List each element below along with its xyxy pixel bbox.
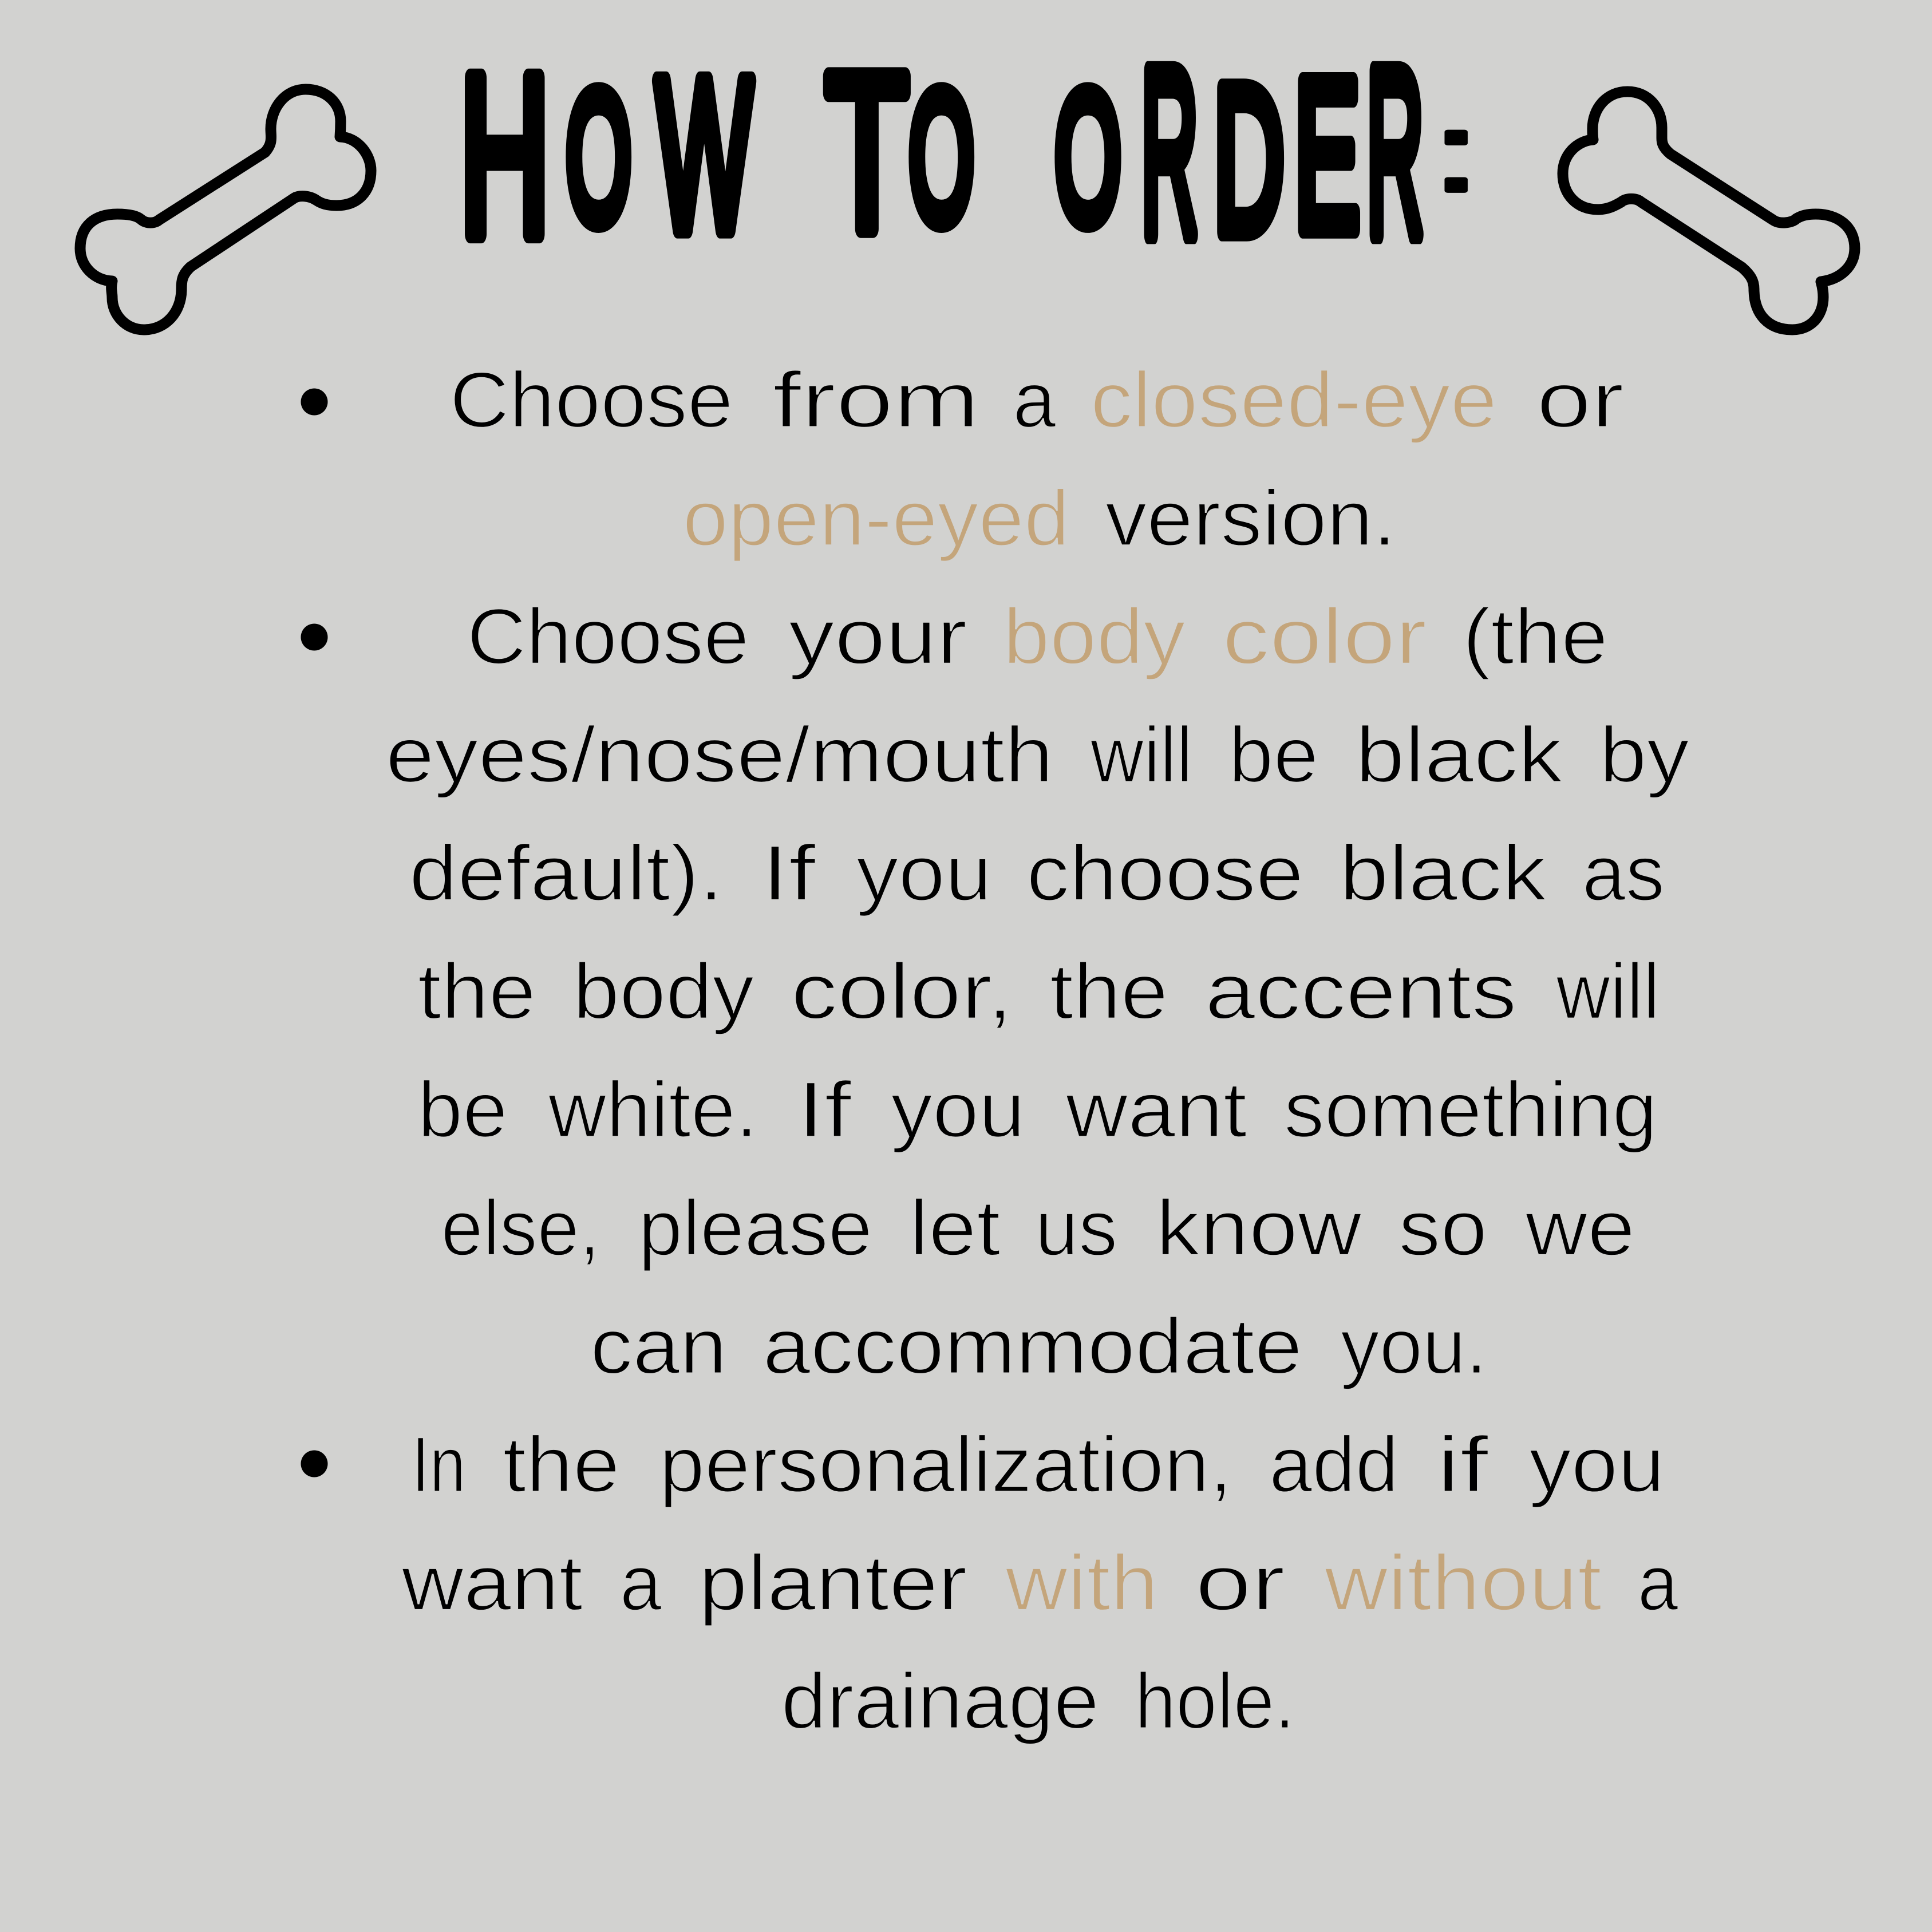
text block: step 3: or xyxy=(1195,1539,1285,1627)
text block: step 1: version. xyxy=(1105,474,1396,562)
title: HOW TO ORDER:: D xyxy=(1214,44,1284,276)
icon: right bone xyxy=(1563,92,1855,330)
text block: step 2: body xyxy=(573,947,754,1036)
text block: step 1: from xyxy=(773,356,979,444)
title: HOW TO ORDER:: O xyxy=(566,54,631,262)
text block: step 1 xyxy=(450,356,1624,562)
title: HOW TO ORDER:: R xyxy=(1141,20,1198,285)
text block: step 2: the xyxy=(1050,947,1168,1036)
text block: step 1: Choose xyxy=(450,356,733,444)
text block: step 2: (the xyxy=(1463,592,1608,681)
text block: step 2: please xyxy=(638,1184,872,1272)
text block: step 2: Choose xyxy=(467,592,749,681)
text block: step 2: want xyxy=(1065,1066,1247,1154)
text block: step 2: accents xyxy=(1205,947,1517,1036)
text block: step 2: If xyxy=(761,829,816,917)
text block: step 2: If xyxy=(797,1066,852,1154)
title: HOW TO ORDER:: O xyxy=(909,54,974,262)
text block: step 2: be xyxy=(418,1066,508,1154)
icon: left bone xyxy=(80,89,371,330)
text block: step 2: will xyxy=(1556,947,1660,1036)
text block: step 2: accommodate xyxy=(762,1302,1302,1390)
text block: step 3: the xyxy=(503,1421,620,1509)
title: HOW TO ORDER:: R xyxy=(1366,20,1424,285)
text block: step 2: be xyxy=(1228,711,1318,799)
text block: step 2: can xyxy=(590,1302,727,1390)
title: HOW TO ORDER:: E xyxy=(1294,35,1360,275)
text block: step 2: as xyxy=(1582,829,1665,917)
title: HOW TO ORDER:: : xyxy=(1432,90,1480,214)
text block: step 3: add xyxy=(1269,1421,1398,1509)
bullet 1 xyxy=(301,388,327,416)
text block: step 1: closed-eye xyxy=(1091,356,1497,444)
text block: step 2: we xyxy=(1525,1184,1635,1272)
bullet 3 xyxy=(301,1451,327,1477)
text block: step 3: drainage xyxy=(781,1657,1099,1745)
text block: step 2: something xyxy=(1284,1066,1657,1154)
text block: step 2: black xyxy=(1340,829,1547,917)
text block: step 2: will xyxy=(1090,711,1193,799)
text block: step 2: else, xyxy=(441,1184,600,1272)
text block: step 2 xyxy=(386,592,1689,1390)
text block: step 2: you xyxy=(856,829,992,917)
text block: step 3 xyxy=(401,1421,1678,1745)
text block: step 3: with xyxy=(1005,1539,1158,1627)
text block: step 1: open-eyed xyxy=(682,474,1069,562)
text block: step 2: default). xyxy=(409,829,724,917)
title: HOW TO ORDER: xyxy=(460,20,1480,285)
title: HOW TO ORDER:: O xyxy=(1055,53,1121,262)
text block: step 2: you. xyxy=(1341,1302,1487,1390)
text block: step 1: a xyxy=(1013,356,1056,444)
text block: step 3: want xyxy=(401,1539,583,1627)
title: HOW TO ORDER:: W xyxy=(656,35,753,275)
text block: step 3: In xyxy=(412,1421,466,1509)
text block: step 2: choose xyxy=(1026,829,1303,917)
text block: step 3: a xyxy=(620,1539,662,1627)
text block: step 2: eyes/nose/mouth xyxy=(386,711,1053,799)
text block: step 3: personalization, xyxy=(659,1421,1232,1509)
title: HOW TO ORDER:: T xyxy=(825,29,908,276)
text block: step 3: planter xyxy=(698,1539,967,1627)
text block: step 1: or xyxy=(1536,356,1624,444)
text block: step 2: body xyxy=(1003,592,1186,681)
text block: step 2: us xyxy=(1035,1184,1117,1272)
text block: step 2: black xyxy=(1356,711,1563,799)
title: HOW TO ORDER:: H xyxy=(460,29,550,282)
text block: step 2: by xyxy=(1599,711,1689,799)
text block: step 2: white. xyxy=(548,1066,758,1154)
bullet 2 xyxy=(301,624,327,650)
text block: step 3: without xyxy=(1324,1539,1602,1627)
text block: step 2: so xyxy=(1398,1184,1487,1272)
text block: step 2: you xyxy=(891,1066,1025,1154)
text block: step 2: color xyxy=(1222,592,1427,681)
text block: step 2: let xyxy=(910,1184,1001,1272)
text block: step 2: the xyxy=(418,947,536,1036)
text block: step 3: hole. xyxy=(1135,1657,1295,1745)
text block: step 3: a xyxy=(1638,1539,1678,1627)
text block: step 3: if xyxy=(1437,1421,1489,1509)
text block: step 3: you xyxy=(1529,1421,1665,1509)
text block: step 2: color, xyxy=(791,947,1013,1036)
text block: step 2: your xyxy=(789,592,967,681)
text block: step 2: know xyxy=(1156,1184,1362,1272)
